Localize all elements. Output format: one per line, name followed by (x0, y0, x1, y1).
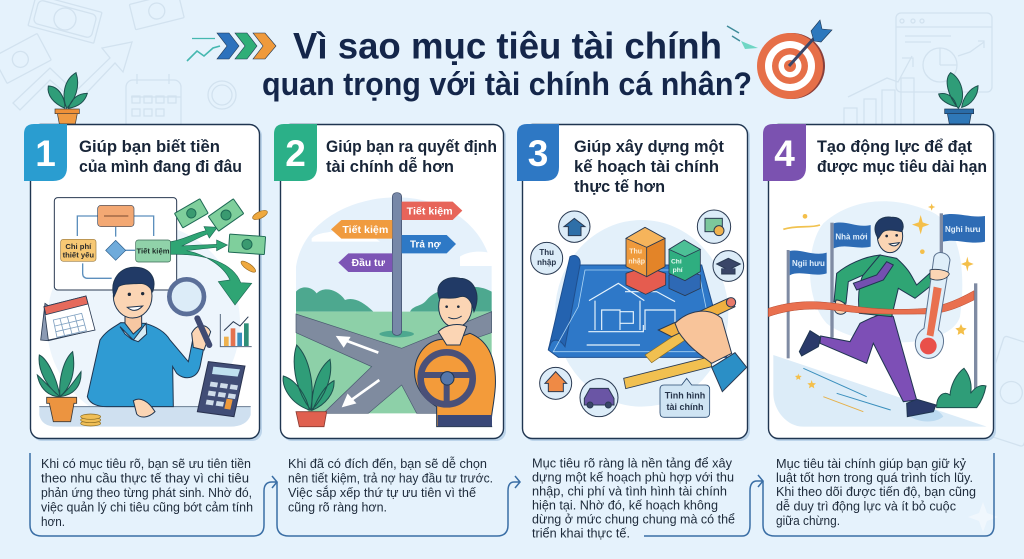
plant (937, 368, 986, 408)
heading 2: tài chính dễ hơn (326, 157, 454, 176)
panel: card 3 (517, 124, 750, 441)
heading 2 (326, 137, 497, 176)
post (379, 331, 414, 337)
budget blocks (626, 227, 700, 296)
heading 1: của mình đang đi đâu (79, 157, 242, 176)
finish ribbon (768, 291, 974, 317)
text block 4 (776, 456, 976, 528)
text block 4: Khi theo dõi được tiến độ, bạn cũng (776, 484, 976, 499)
sparkle bottom right (968, 502, 998, 532)
number badge 4 (763, 124, 806, 181)
number badge 1: 1 (35, 133, 56, 174)
budget blocks: phí (673, 267, 684, 274)
text block 4: Mục tiêu tài chính giúp bạn giữ kỷ (776, 456, 966, 471)
illustration: blueprint and budget blocks (531, 210, 747, 417)
illustration: blueprint and budget blocks: nhập (537, 258, 556, 267)
icon: target with arrow (727, 20, 832, 99)
panel: card 2 (274, 124, 506, 441)
title: Vì sao mục tiêu tài chính (293, 26, 722, 66)
budget blocks: Thu (629, 248, 642, 255)
callout: financial situation: tài chính (667, 402, 703, 412)
icon: right potted plant (939, 73, 978, 124)
plant on desk (37, 352, 81, 397)
text block 3: nhập, chi phí và tình hình tài chính (532, 484, 727, 498)
flags: Nhà mới (835, 232, 868, 241)
runner (799, 217, 938, 417)
heading 1: Giúp bạn biết tiền (79, 137, 220, 156)
illustration: man reviewing cash flow (37, 198, 269, 427)
text block 2: Việc sắp xếp thứ tự ưu tiên vì thế (288, 485, 477, 500)
text block 3: Mục tiêu rõ ràng là nền tảng để xây (532, 456, 732, 470)
heading 3: kế hoạch tài chính (574, 157, 719, 176)
text block 1: theo nhu cầu thực tế thay vì chi tiêu (41, 470, 249, 486)
connector arrows framing the text blocks (30, 453, 994, 536)
text block 3 (532, 456, 735, 540)
heading 3 (574, 137, 724, 196)
heading 3: Giúp xây dựng một (574, 137, 724, 156)
flow chart: thiết yếu (63, 251, 94, 260)
calculator (197, 362, 245, 417)
heading 4: Tạo động lực để đạt (817, 137, 972, 156)
flags: Nghỉ hưu (945, 225, 981, 234)
hand with pencil (658, 298, 747, 392)
icon: chevrons with trend line (187, 33, 276, 61)
text block 1 (41, 456, 253, 529)
text block 1: Khi có mục tiêu rõ, bạn sẽ ưu tiên tiền (41, 456, 251, 471)
calendar (41, 296, 95, 341)
text block 3: triển khai thực tế. (532, 526, 630, 540)
thinking man (415, 278, 495, 427)
panel: card 1 (24, 124, 269, 441)
number badge 4: 4 (774, 133, 795, 174)
man (87, 267, 211, 417)
text block 4: luật tốt hơn trong quá trình tích lũy. (776, 470, 973, 485)
budget blocks: Chi (671, 258, 682, 265)
direction signs: Đầu tư (352, 258, 385, 269)
title: quan trọng với tài chính cá nhân? (262, 66, 752, 102)
flow chart: Tiết kiệm (136, 246, 170, 255)
title (262, 26, 752, 102)
thermometer (915, 253, 950, 358)
callout: financial situation: Tình hình (665, 391, 705, 401)
green arrows (171, 227, 252, 305)
coins (81, 414, 101, 426)
illustration: crossroads and signpost (283, 193, 495, 427)
hills (296, 287, 492, 312)
flow chart: Chi phí (65, 242, 92, 251)
number badge 1 (24, 124, 67, 181)
heading 1 (79, 137, 242, 176)
text block 1: phản ứng theo từng phát sinh. Nhờ đó, (41, 485, 252, 500)
heading 4: được mục tiêu dài hạn (817, 157, 987, 176)
background financial doodles (0, 0, 1024, 447)
panel: card 4 (763, 124, 996, 441)
blueprint (548, 256, 727, 357)
text block 4: dễ duy trì động lực và ít bỏ cuộc (776, 498, 956, 514)
direction signs: Trả nợ (410, 240, 441, 251)
heading 3: thực tế hơn (574, 177, 665, 196)
text block 2 (288, 456, 493, 514)
ground (296, 312, 492, 413)
text block 2: nên tiết kiệm, trả nợ hay đầu tư trước. (288, 470, 493, 486)
text block 2: Khi đã có đích đến, bạn sẽ dễ chọn (288, 456, 487, 471)
flow chart (54, 198, 177, 290)
direction signs: Tiết kiệm (342, 225, 388, 236)
flags: Ngii hưu (792, 259, 825, 268)
small chart (220, 314, 252, 347)
ruler (624, 357, 712, 389)
illustration: runner at the finish ribbon (768, 201, 987, 427)
text block 1: hơn. (41, 514, 65, 529)
icon: left potted plant (48, 73, 87, 124)
direction signs: Tiết kiệm (407, 206, 453, 217)
clouds (312, 226, 492, 266)
illustration: blueprint and budget blocks: Thu (539, 248, 554, 257)
magnifier (169, 279, 209, 345)
text block 4: giữa chừng. (776, 513, 840, 528)
roads (296, 312, 492, 413)
number badge 2: 2 (285, 133, 306, 174)
round icons (531, 210, 744, 417)
ground (773, 355, 987, 427)
text block 2: cũng rõ ràng hơn. (288, 500, 387, 514)
heading 4 (817, 137, 987, 176)
text block 1: việc quản lý chi tiêu cũng bớt cảm tính (41, 500, 253, 514)
text block 3: dừng ở mức chung chung mà có thể (532, 512, 735, 526)
money notes (174, 199, 266, 255)
sparkles and stars (795, 203, 974, 388)
number badge 3 (517, 124, 559, 181)
number badge 2 (274, 124, 317, 181)
direction signs (331, 202, 462, 272)
number badge 3: 3 (528, 133, 548, 174)
text block 3: hiện tại. Nhờ đó, kế hoạch không (532, 498, 718, 512)
heading 2: Giúp bạn ra quyết định (326, 137, 497, 156)
plant (283, 345, 334, 427)
desk (39, 407, 251, 427)
callout: financial situation (660, 378, 710, 417)
text block 3: dựng một kế hoạch phù hợp với thu (532, 470, 734, 484)
budget blocks: nhập (628, 258, 645, 265)
flags (787, 213, 985, 407)
